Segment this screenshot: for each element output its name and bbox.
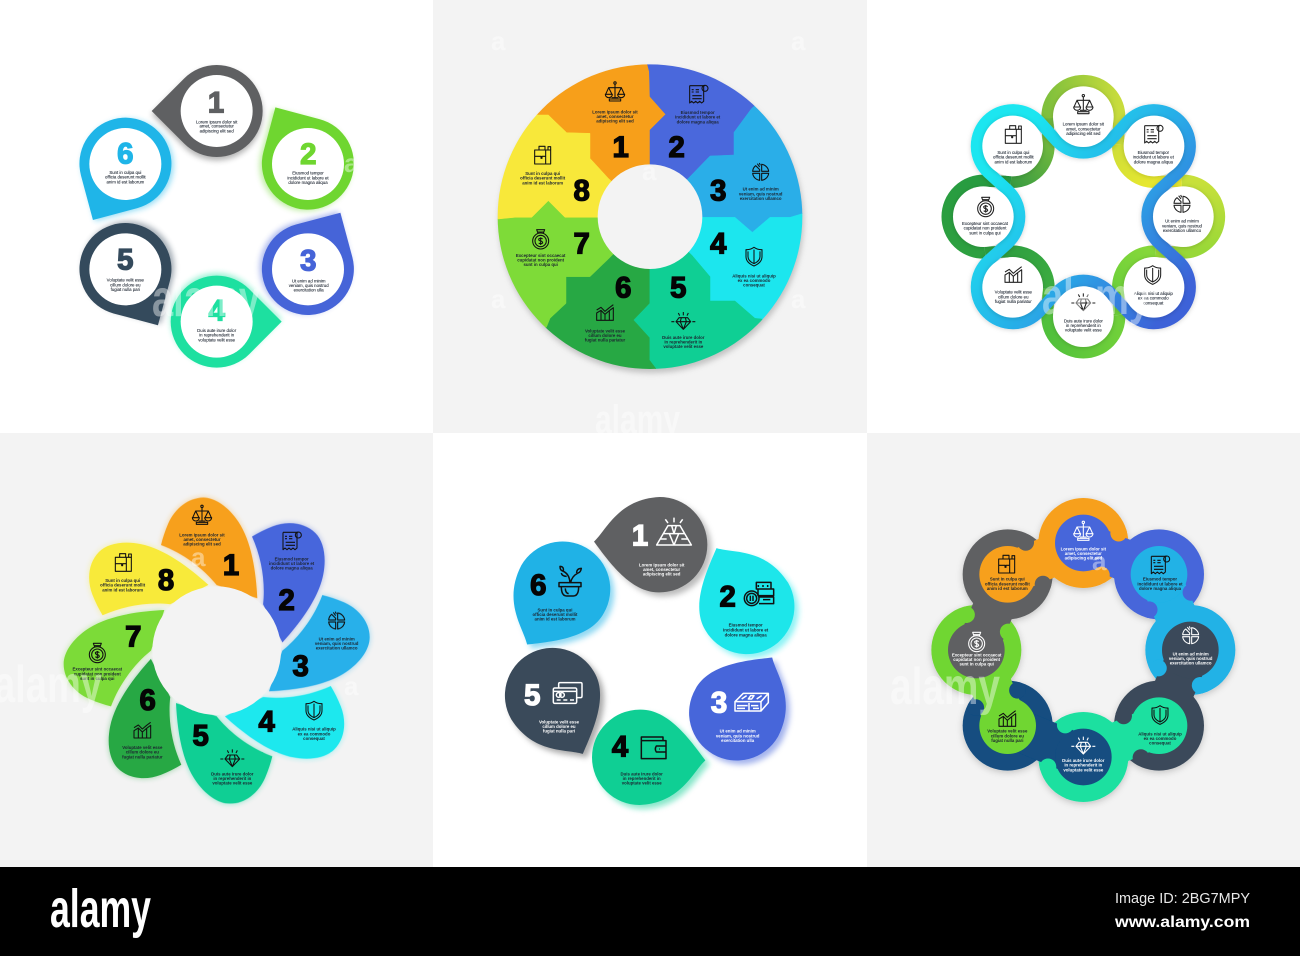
drop 2: 2 <box>720 580 736 613</box>
ring step 2 <box>1133 125 1175 164</box>
pin 1 <box>152 65 263 157</box>
panel: six drops <box>487 497 816 809</box>
petal step 2: incididunt ut labore et <box>269 561 315 566</box>
petal step 4 <box>259 701 336 741</box>
blob step 8: Sunt in culpa qui <box>990 577 1025 582</box>
pin 2: incididunt ut labore et <box>287 175 329 180</box>
wheel step 8 <box>520 146 590 207</box>
petal step 3: exercitation ullamco <box>316 646 358 651</box>
blob step 8: officia deserunt mollit <box>985 581 1030 586</box>
drop 2: dolore magna aliqua <box>725 632 767 637</box>
pin 3: veniam, quis nostrud <box>289 283 329 288</box>
panel: puzzle wheel <box>496 64 806 376</box>
petal step 5: 5 <box>193 719 209 752</box>
drop 4 <box>592 710 705 805</box>
petal step 7: 7 <box>125 621 141 654</box>
blob step 1: Lorem ipsum dolor sit <box>1061 546 1107 551</box>
white ring discs <box>953 86 1214 347</box>
blob step 7: Excepteur sint occaecat <box>952 652 1002 657</box>
ring step 2: dolore magna aliqua <box>1134 159 1174 164</box>
watermarks: alamy <box>152 270 260 328</box>
footer bar <box>0 867 1300 956</box>
watermarks: alamy <box>595 398 681 442</box>
green ribbon <box>947 81 1219 353</box>
blob step 2 <box>1137 556 1183 591</box>
drop 1: amet, consectetur <box>643 567 681 572</box>
ring step 8 <box>993 126 1034 164</box>
watermarks <box>0 26 1150 716</box>
drop 5: fugiat nulla pari <box>543 729 575 734</box>
petal step 7: cupidatat non proident <box>74 671 121 676</box>
segment 3 <box>687 106 802 232</box>
blob step 8 <box>985 555 1030 591</box>
wheel step 2 <box>669 85 721 164</box>
pin 4 <box>171 276 282 368</box>
footer logo: alamy <box>50 879 151 939</box>
drop 1: adipiscing elit sed <box>643 572 681 577</box>
petal step 7: sunt in culpa qui <box>80 676 115 681</box>
blob step 2: dolore magna aliqua <box>1139 586 1182 591</box>
drop 4: voluptate velit esse <box>622 781 662 786</box>
ring step 7: sunt in culpa qui <box>969 230 1001 235</box>
drop 1: Lorem ipsum dolor sit <box>639 562 685 567</box>
petal step 3: 3 <box>293 650 309 683</box>
petal step 4: Aliquis nisi ut aliquip <box>292 727 336 732</box>
petal step 2: 2 <box>279 584 295 617</box>
wheel step 2: dolore magna aliqua <box>677 119 719 124</box>
drop 4: in reprehenderit in <box>623 776 661 781</box>
petal step 6: 6 <box>140 684 156 717</box>
panel: linked blobs <box>931 498 1235 802</box>
blob step 1: amet, consectetur <box>1065 551 1102 556</box>
pin 1: amet, consectetur <box>199 124 234 129</box>
blob rings <box>931 498 1235 802</box>
ring step 7: Excepteur sint occaecat <box>962 221 1009 226</box>
drop 6: 6 <box>530 569 546 602</box>
petal step 3: veniam, quis nostrud <box>315 641 359 646</box>
petal step 1: 1 <box>223 549 239 582</box>
pin shadows <box>55 68 378 365</box>
ring step 6 <box>995 267 1033 304</box>
ring step 5: Duis aute irure dolor <box>1064 318 1103 323</box>
wheel step 6 <box>585 272 631 343</box>
wheel step 7: cupidatat non proident <box>517 257 565 262</box>
ring step 7: cupidatat non proident <box>964 226 1007 231</box>
wheel step 3: veniam, quis nostrud <box>739 191 783 196</box>
ring step 3: Ut enim ad minim <box>1165 219 1199 224</box>
blob step 3 <box>1169 626 1213 666</box>
pin 3: exercitation ulla <box>294 288 324 293</box>
wheel step 6: fugiat nulla pariatur <box>585 338 626 343</box>
wheel step 6: Voluptate velit esse <box>585 328 626 333</box>
pin 4: 4 <box>209 294 226 327</box>
blob step 6: Voluptate velit esse <box>987 729 1028 734</box>
image id: Image ID: 2BG7MPY <box>1115 890 1250 907</box>
ring step 6: Voluptate velit esse <box>995 290 1033 295</box>
petal step 8 <box>100 554 174 597</box>
wheel step 8: 8 <box>574 174 590 207</box>
petal step 6: Voluptate velit esse <box>122 745 163 750</box>
pin 5: Voluptate velit esse <box>107 278 145 283</box>
wheel step 7 <box>516 228 590 267</box>
petal step 1: amet, consectetur <box>183 537 221 542</box>
ring step 8: officia deserunt mollit <box>993 155 1034 160</box>
blob step 8: anim id est laborum <box>987 586 1028 591</box>
wheel step 1 <box>592 82 638 164</box>
petal step 6: fugiat nulla pariatur <box>122 754 163 759</box>
petal glows <box>64 498 370 804</box>
pin 2: dolore magna aliqua <box>288 180 328 185</box>
blob step 4: ex ea commodo <box>1144 736 1177 741</box>
drop 5: 5 <box>524 679 540 712</box>
wheel step 2: 2 <box>669 131 685 164</box>
wheel step 5: 5 <box>670 272 686 305</box>
ring step 3 <box>1162 195 1203 233</box>
petal step 8: officia deserunt mollit <box>100 583 146 588</box>
wheel step 5: in reprehenderit in <box>664 339 703 344</box>
watermarks: a <box>1092 546 1107 576</box>
segment 5 <box>634 252 762 369</box>
petal step 5: voluptate velit esse <box>212 781 253 786</box>
pin 1: Lorem ipsum dolor sit <box>196 119 238 124</box>
pin 1: adipiscing elit sed <box>200 128 234 133</box>
ring step 4: Aliquis nisi ut aliquip <box>1134 291 1173 296</box>
petal step 2: Eiusmod tempor <box>275 556 309 561</box>
blob step 5: voluptate velit esse <box>1063 767 1104 772</box>
drop 3: 3 <box>711 687 727 720</box>
petal step 1: adipiscing elit sed <box>183 542 221 547</box>
blob step 4 <box>1138 706 1182 746</box>
blob step 5: in reprehenderit in <box>1064 763 1103 768</box>
petal step 5: Duis aute irure dolor <box>211 771 254 776</box>
wheel step 1: Lorem ipsum dolor sit <box>592 109 638 114</box>
blob step 2: Eiusmod tempor <box>1143 577 1177 582</box>
drop 3: exercitation ulla <box>721 738 755 743</box>
ring step 1: amet, consectetur <box>1066 126 1101 131</box>
wheel step 1: amet, consectetur <box>596 114 634 119</box>
drop 5: cillum dolore eu <box>542 724 576 729</box>
petal hub <box>152 586 281 715</box>
wheel step 7: Excepteur sint occaecat <box>516 253 566 258</box>
wheel step 5 <box>662 272 705 349</box>
ring step 3: exercitation ullamco <box>1163 228 1202 233</box>
watermarks: alamy <box>890 658 1000 716</box>
drop 3: veniam, quis nostrud <box>716 733 760 738</box>
petal step 6 <box>122 684 163 759</box>
blob step 4: consequat <box>1149 741 1171 746</box>
blob step 1 <box>1061 521 1107 561</box>
pin 6: anim id est laborum <box>106 179 145 184</box>
ring step 2: incididunt ut labore et <box>1133 155 1175 160</box>
petal 2 <box>214 503 354 642</box>
watermarks: a <box>791 26 806 56</box>
petal step 4: ex ea commodo <box>298 731 331 736</box>
watermarks: a <box>491 284 506 314</box>
watermarks: a <box>344 148 359 178</box>
drop shadows <box>491 501 816 809</box>
blob step 7: cupidatat non proident <box>953 657 1001 662</box>
drop 2 <box>673 526 812 672</box>
segment 1 <box>536 64 666 182</box>
blob step 7: sunt in culpa qui <box>959 662 994 667</box>
ring step 1 <box>1063 94 1105 136</box>
blob step 2: incididunt ut labore et <box>1137 581 1183 586</box>
pin 5: 5 <box>117 243 133 276</box>
ring step 5: voluptate velit esse <box>1065 328 1102 333</box>
wheel step 3: Ut enim ad minim <box>743 187 779 192</box>
petal step 5: in reprehenderit in <box>213 776 252 781</box>
pin 5: fugiat nulla pari <box>111 287 140 292</box>
watermarks: a <box>642 156 657 186</box>
blob step 5: Duis aute irure dolor <box>1062 758 1105 763</box>
petal step 2: dolore magna aliqua <box>271 566 313 571</box>
petal 5 <box>176 703 272 804</box>
petal step 8: Sunt in culpa qui <box>105 578 140 583</box>
watermarks: a <box>491 26 506 56</box>
drop 3: Ut enim ad minim <box>720 729 756 734</box>
petal step 7 <box>73 621 141 681</box>
pin 4: in reprehenderit in <box>199 333 235 338</box>
ring step 5: in reprehenderit in <box>1066 323 1101 328</box>
pin 2: 2 <box>300 138 316 171</box>
wheel step 1: 1 <box>613 131 629 164</box>
ring step 1: adipiscing elit sed <box>1066 131 1101 136</box>
segment 7 <box>498 200 614 328</box>
wheel step 8: anim id est laborum <box>522 180 563 185</box>
wheel step 1: adipiscing elit sed <box>596 119 634 124</box>
ring step 6: cillum dolore eu <box>998 294 1029 299</box>
blob step 5 <box>1062 737 1105 772</box>
petal 1 <box>161 498 257 598</box>
blob step 4: Aliquis nisi ut aliquip <box>1138 731 1182 736</box>
panel: woven rings <box>947 81 1219 353</box>
drop 1 <box>594 497 707 592</box>
wheel shadow <box>499 68 804 373</box>
blue ribbon <box>977 110 1190 323</box>
drop 3 <box>672 632 811 778</box>
ring step 8: Sunt in culpa qui <box>997 150 1029 155</box>
blob step 7 <box>952 632 1002 667</box>
drop 6: anim id est laborum <box>535 617 576 622</box>
drop 2: Eiusmod tempor <box>729 623 763 628</box>
petal 6 <box>80 659 219 798</box>
watermarks: a <box>344 671 359 701</box>
site url: www.alamy.com <box>1114 914 1250 931</box>
pin 6: Sunt in culpa qui <box>109 170 141 175</box>
drop 2: incididunt ut labore et <box>723 628 769 633</box>
petal 7 <box>64 610 164 706</box>
petal step 2 <box>269 532 315 617</box>
petal step 7: Excepteur sint occaecat <box>73 667 123 672</box>
petal step 8: anim id est laborum <box>102 587 143 592</box>
wheel step 5: Duis aute irure dolor <box>662 335 705 340</box>
ring step 7 <box>962 197 1009 235</box>
petal step 1 <box>179 505 239 582</box>
blob step 6 <box>987 711 1028 743</box>
petal step 3 <box>293 612 359 683</box>
drop 5: Voluptate velit esse <box>539 719 580 724</box>
pin 5 <box>63 206 198 348</box>
blob step 6: fugiat nulla pari <box>991 738 1023 743</box>
ring step 4 <box>1134 266 1173 305</box>
petal 4 <box>225 648 364 788</box>
wheel step 4: ex ea commodo <box>738 278 771 283</box>
pin 6: officia deserunt mollit <box>105 175 146 180</box>
watermarks: alamy <box>1042 268 1150 326</box>
wheel step 8: Sunt in culpa qui <box>525 171 560 176</box>
wheel hole <box>598 164 702 269</box>
wheel step 3: 3 <box>710 174 726 207</box>
pin 1: 1 <box>208 86 224 119</box>
ring step 4: ex ea commodo <box>1138 296 1169 301</box>
ring step 3: veniam, quis nostrud <box>1162 223 1203 228</box>
blob step 3: Ut enim ad minim <box>1173 651 1209 656</box>
segment 2 <box>647 64 754 180</box>
segment 8 <box>498 114 612 220</box>
petal step 6: cillum dolore eu <box>126 750 159 755</box>
wheel step 7: 7 <box>574 228 590 261</box>
petal step 4: 4 <box>259 706 276 739</box>
pin 3: Ut enim ad minim <box>292 278 326 283</box>
petal step 8: 8 <box>158 564 174 597</box>
wheel step 6: 6 <box>615 272 631 305</box>
drop 5 <box>487 630 627 776</box>
petal step 5 <box>193 719 254 786</box>
wheel step 4: 4 <box>710 228 727 261</box>
petal 3 <box>269 595 370 691</box>
ring step 1: Lorem ipsum dolor sit <box>1063 122 1105 127</box>
watermarks: a <box>191 542 206 572</box>
wheel step 3: exercitation ullamco <box>740 196 782 201</box>
wheel step 2: Eiusmod tempor <box>681 110 715 115</box>
pin 5: cillum dolore eu <box>110 282 141 287</box>
drop 6: Sunt in culpa qui <box>538 607 572 612</box>
drop 1: 1 <box>632 519 648 552</box>
ring step 2: Eiusmod tempor <box>1138 150 1170 155</box>
segment 4 <box>688 213 802 320</box>
wheel step 4 <box>710 228 776 288</box>
wheel step 4: Aliquis nisi ut aliquip <box>732 273 776 278</box>
wheel step 6: cillum dolore eu <box>588 333 622 338</box>
drop 6: officia deserunt mollit <box>533 612 578 617</box>
petal step 4: consequat <box>303 736 325 741</box>
wheel step 4: consequat <box>743 283 765 288</box>
watermarks: a <box>791 284 806 314</box>
wheel step 7: sunt in culpa qui <box>523 262 558 267</box>
ring step 4: consequat <box>1143 300 1164 305</box>
blob step 1: adipiscing elit sed <box>1065 556 1102 561</box>
pin 2 <box>236 84 371 226</box>
petal step 3: Ut enim ad minim <box>319 636 355 641</box>
segment 6 <box>546 254 656 369</box>
wheel step 8: officia deserunt mollit <box>520 176 566 181</box>
wheel step 5: voluptate velit esse <box>663 344 704 349</box>
ring step 8: anim id est laborum <box>994 159 1033 164</box>
pin 6 <box>53 101 188 243</box>
panel: eight petals <box>64 498 370 804</box>
blob step 3: exercitation ullamco <box>1170 661 1212 666</box>
drop 6 <box>488 524 628 670</box>
pin 3: 3 <box>300 244 316 277</box>
ring step 5 <box>1064 293 1103 333</box>
pin 6: 6 <box>117 138 133 171</box>
drop 4: Duis aute irure dolor <box>621 771 663 776</box>
drop 4: 4 <box>612 730 629 763</box>
wheel segments <box>498 64 802 369</box>
panel: six pin rings <box>53 65 380 368</box>
pin 4: voluptate velit esse <box>198 337 236 342</box>
ring step 6: fugiat nulla pariatur <box>995 299 1032 304</box>
pin 2: Eiusmod tempor <box>292 171 324 176</box>
petal 8 <box>69 514 208 653</box>
petal step 1: Lorem ipsum dolor sit <box>179 532 225 537</box>
wheel step 3 <box>710 163 783 207</box>
pin 3 <box>245 190 380 332</box>
wheel step 2: incididunt ut labore et <box>675 115 721 120</box>
pin 4: Duis aute irure dolor <box>197 328 237 333</box>
blob step 6: cillum dolore eu <box>991 733 1024 738</box>
blob step 3: veniam, quis nostrud <box>1169 656 1213 661</box>
